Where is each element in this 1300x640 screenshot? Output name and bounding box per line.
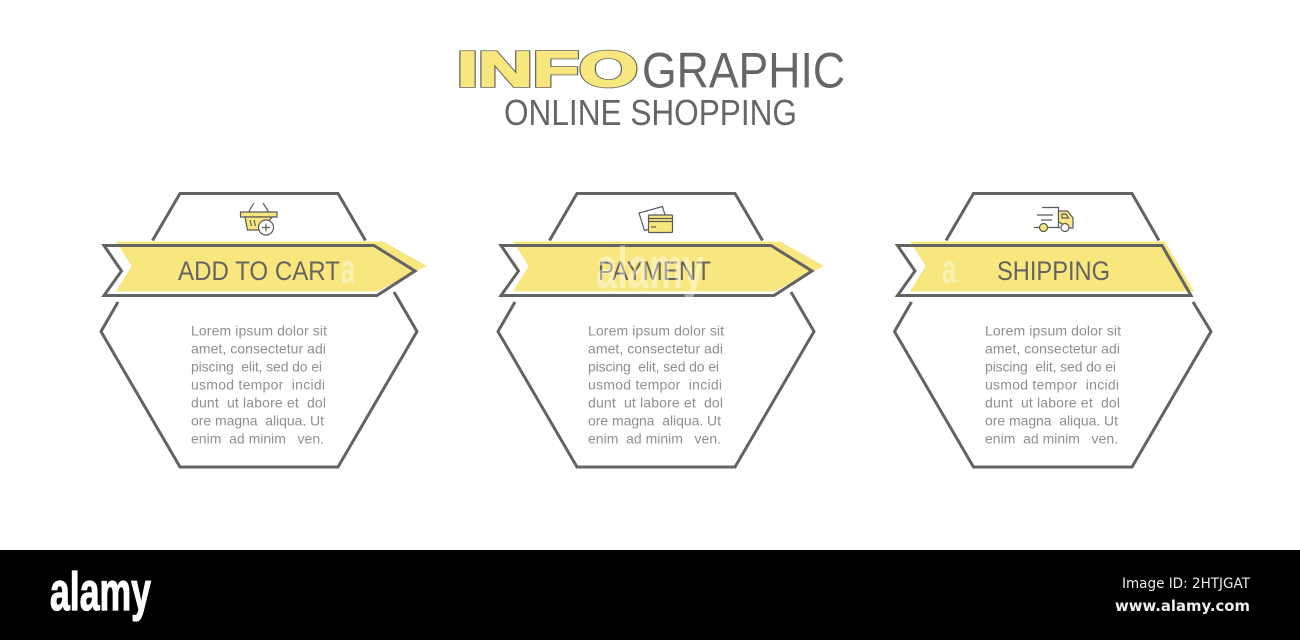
image id: Image ID: 2HTJGAT: [1122, 576, 1250, 592]
icon: credit cards: [639, 206, 672, 232]
body text: ore magna aliqua. Ut: [588, 412, 721, 428]
title word: INFO: INFO: [457, 43, 638, 97]
body text: amet, consectetur adi: [588, 340, 723, 356]
body text: usmod tempor incidi: [191, 376, 325, 392]
hexagon frame: [101, 194, 417, 467]
ribbon label: ADD TO CART: [178, 256, 340, 286]
yellow ribbon: [910, 242, 1194, 292]
body text: [191, 322, 327, 446]
body text: ore magna aliqua. Ut: [191, 412, 324, 428]
body text: enim ad minim ven.: [588, 430, 721, 446]
title: [457, 42, 845, 98]
title word: INFO: [457, 43, 638, 97]
ribbon label: PAYMENT: [598, 256, 711, 286]
body text: Lorem ipsum dolor sit: [985, 322, 1121, 338]
body text: [985, 322, 1121, 446]
icon: delivery truck: [1034, 208, 1073, 232]
body text: [588, 322, 724, 446]
subtitle: ONLINE SHOPPING: [504, 92, 797, 133]
watermark: alamy: [596, 236, 704, 301]
body text: ore magna aliqua. Ut: [985, 412, 1118, 428]
body text: enim ad minim ven.: [985, 430, 1118, 446]
body text: dunt ut labore et dol: [985, 394, 1120, 410]
body text: amet, consectetur adi: [985, 340, 1120, 356]
watermark letter: a: [341, 245, 355, 292]
footer bar: [0, 550, 1300, 640]
yellow ribbon: [116, 242, 427, 292]
website url: www.alamy.com: [1115, 597, 1250, 615]
body text: Lorem ipsum dolor sit: [191, 322, 327, 338]
footer logo: alamy: [50, 562, 151, 622]
panel: payment: [498, 194, 824, 467]
body text: usmod tempor incidi: [985, 376, 1119, 392]
body text: usmod tempor incidi: [588, 376, 722, 392]
hexagon frame: [498, 194, 814, 467]
body text: piscing elit, sed do ei: [191, 358, 322, 374]
watermark letter: a: [942, 245, 956, 292]
body text: amet, consectetur adi: [191, 340, 326, 356]
panel: add to cart: [101, 194, 427, 467]
title word: INFO: INFO: [457, 43, 638, 97]
yellow ribbon: [513, 242, 824, 292]
body text: enim ad minim ven.: [191, 430, 324, 446]
body text: piscing elit, sed do ei: [985, 358, 1116, 374]
panel: shipping: [894, 194, 1211, 467]
body text: Lorem ipsum dolor sit: [588, 322, 724, 338]
ribbon outline arrow: [501, 246, 812, 296]
body text: piscing elit, sed do ei: [588, 358, 719, 374]
body text: dunt ut labore et dol: [191, 394, 326, 410]
title word: GRAPHIC: GRAPHIC: [642, 42, 845, 98]
hexagon frame: [894, 194, 1211, 467]
ribbon label: SHIPPING: [997, 256, 1110, 286]
ribbon outline arrow: [898, 246, 1191, 296]
ribbon outline arrow: [104, 246, 415, 296]
icon: shopping basket: [240, 203, 277, 235]
body text: dunt ut labore et dol: [588, 394, 723, 410]
